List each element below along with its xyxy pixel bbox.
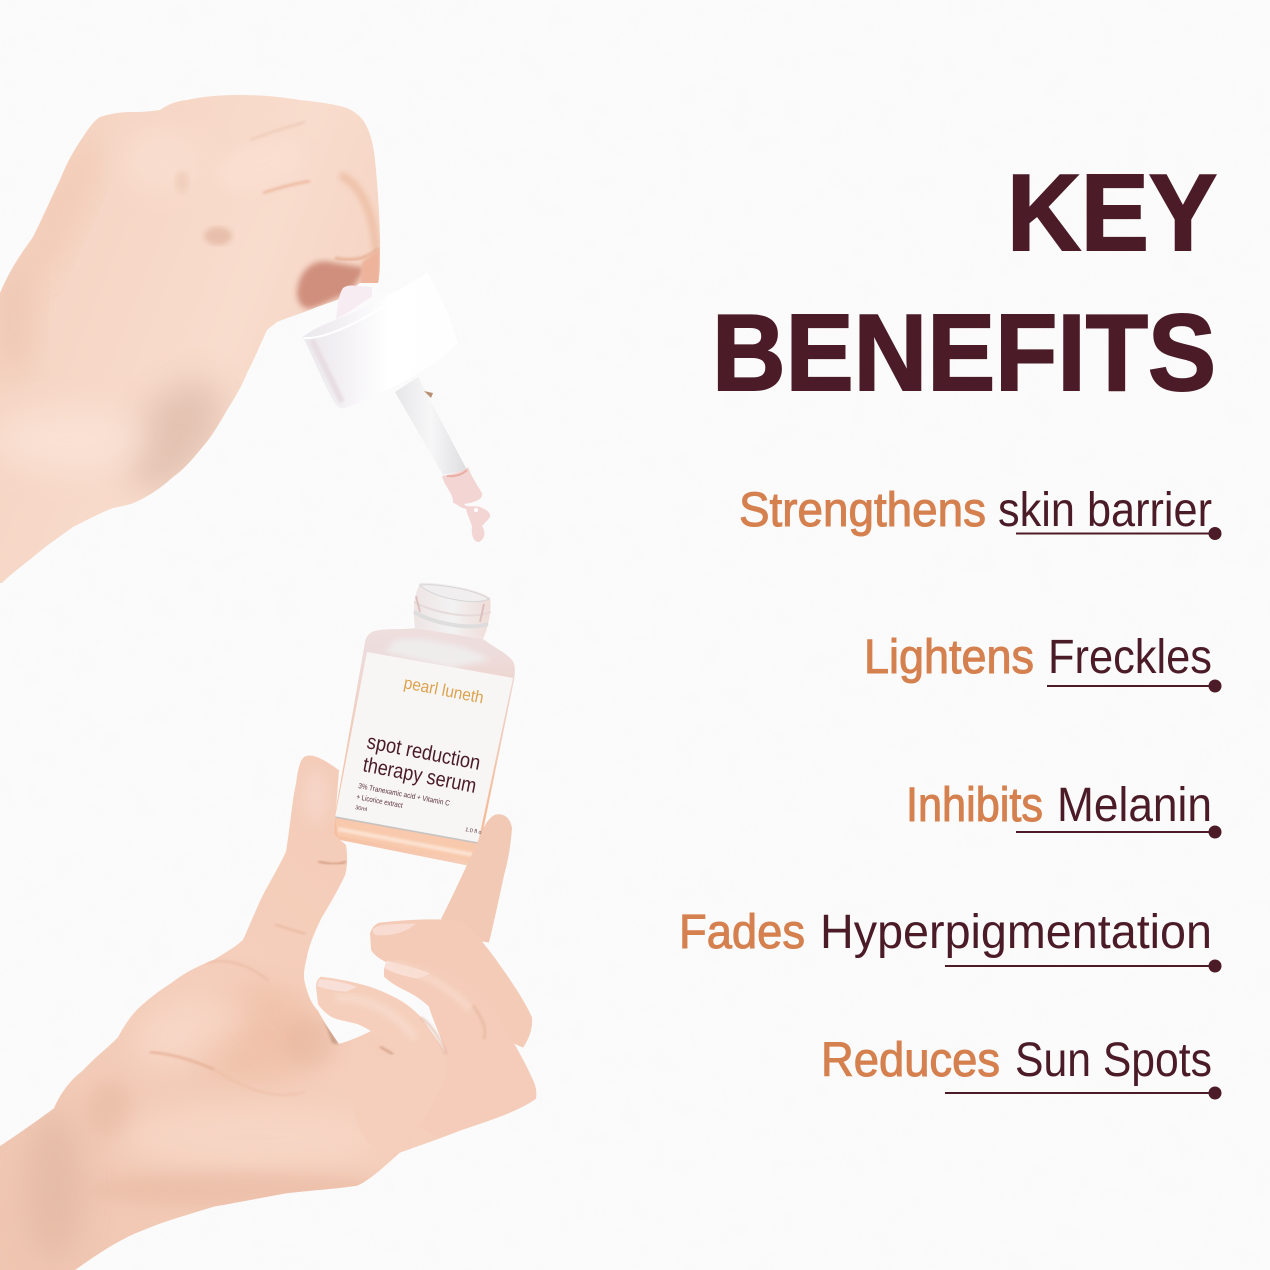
bottle shoulder highlight [385, 639, 490, 668]
hand: lower hand holding bottle [0, 756, 536, 1270]
benefit: Lightens Freckles: Freckles [1048, 631, 1212, 684]
benefit: Inhibits Melanin: Inhibits [906, 779, 1043, 832]
bottle body [333, 628, 515, 865]
benefit: Inhibits Melanin [906, 779, 1222, 838]
text: ingredients: + Licorice extract [356, 792, 404, 810]
title: KEY BENEFITS [712, 152, 1217, 414]
bottle: serum bottle [333, 583, 515, 865]
finger: middle finger [384, 959, 536, 1138]
text: product name: spot reduction [365, 730, 482, 775]
text: ingredients: 1.0 fl oz [465, 827, 485, 837]
palm and thumb [0, 756, 536, 1270]
icon: glass pipette [395, 377, 490, 542]
hand: upper hand holding dropper [0, 95, 380, 583]
label [335, 652, 513, 843]
text: brand name: pearl luneth [402, 673, 485, 707]
icon: bottle neck [414, 583, 491, 639]
finger: outer finger touching bottle [441, 814, 512, 943]
finger: index finger [316, 977, 447, 1156]
icon: dropper cap [303, 273, 458, 408]
text: ingredients: 3% Tranexamic acid + Vitamin C [358, 781, 451, 808]
text: product name [361, 730, 482, 798]
benefit: Strengthens skin barrier: Strengthens [739, 484, 986, 537]
benefit: Inhibits Melanin: Melanin [1057, 779, 1212, 832]
benefit: Fades Hyperpigmentation: Fades [679, 906, 805, 959]
benefit: Reduces Sun Spots: Sun Spots [1015, 1034, 1212, 1087]
bottle base layers [335, 818, 478, 862]
benefit: Reduces Sun Spots [821, 1034, 1222, 1100]
text: product name: therapy serum [361, 753, 478, 798]
nail: ring finger nail [372, 924, 416, 935]
title: KEY BENEFITS: KEY [1007, 152, 1217, 274]
benefit: Lightens Freckles: Lightens [864, 631, 1034, 684]
finger: ring finger [370, 919, 532, 1048]
title: KEY BENEFITS: BENEFITS [712, 292, 1216, 414]
benefit: Lightens Freckles [864, 631, 1222, 692]
dropper: cap and glass pipette [303, 273, 490, 542]
icon: dropper bulb nozzle [336, 285, 372, 319]
text: ingredients [355, 781, 485, 837]
benefit: Fades Hyperpigmentation: Hyperpigmentation [820, 906, 1212, 959]
benefit: Reduces Sun Spots: Reduces [821, 1034, 1000, 1087]
benefit: Strengthens skin barrier [739, 484, 1222, 540]
text: ingredients: 30ml [355, 805, 367, 813]
benefit: Strengthens skin barrier: skin barrier [998, 484, 1212, 537]
benefit: Fades Hyperpigmentation [679, 906, 1222, 972]
